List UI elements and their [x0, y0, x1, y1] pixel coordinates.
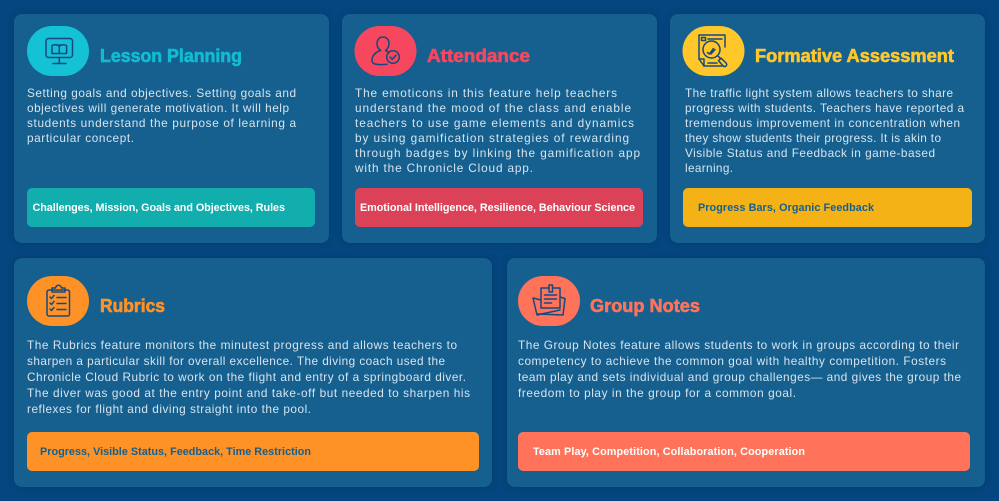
- tag: Group Notes game elements: [518, 432, 970, 471]
- text block: Attendance description: with the Chronicle Cloud app.: [354, 161, 533, 175]
- tag: Attendance game elements: Emotional Intelligence, Resilience, Behaviour Science: [360, 202, 635, 214]
- text block: Formative Assessment description: tremendous improvement in concentration when: [685, 116, 960, 130]
- text block: Formative Assessment description: learning.: [685, 161, 733, 175]
- text block: Group Notes description: team play and sets individual and group challenges— and gives the group the: [518, 370, 961, 384]
- text block: Attendance description: understand the mood of the class and enable: [355, 101, 631, 115]
- text block: Attendance description: through badges by linking the gamification app: [355, 146, 640, 160]
- tag: Formative Assessment game elements: [683, 188, 972, 227]
- text block: Attendance description: by using gamification strategies of rewarding: [355, 131, 629, 145]
- tag: Attendance game elements: [355, 188, 643, 227]
- text block: Group Notes description: [518, 338, 961, 400]
- text block: Lesson Planning description: objectives will generate motivation. It will help: [27, 101, 289, 115]
- text block: Lesson Planning description: particular concept.: [27, 131, 134, 145]
- heading: Formative Assessment: Formative Assessment: [755, 46, 954, 66]
- tag: Rubrics game elements: Progress, Visible Status, Feedback, Time Restriction: [40, 446, 311, 458]
- text block: Group Notes description: freedom to play in the group for a common goal.: [518, 386, 796, 400]
- text block: Formative Assessment description: Visible Status and Feedback in game-based: [685, 146, 935, 160]
- icon: person with check badge: [354, 26, 416, 76]
- text block: Attendance description: teachers to use game elements and dynamics: [355, 116, 634, 130]
- text block: Rubrics description: The Rubrics feature monitors the minutest progress and allows teachers to: [27, 338, 457, 352]
- text block: Rubrics description: Chronicle Cloud Rubric to work on the flight and entry of a springboard diver.: [27, 370, 466, 384]
- heading: Rubrics: Rubrics: [100, 296, 165, 316]
- tag: Lesson Planning game elements: [27, 188, 315, 227]
- text block: Formative Assessment description: they show students their progress. It is akin to: [685, 131, 941, 145]
- tag: Rubrics game elements: [27, 432, 479, 471]
- heading: Attendance: Attendance: [427, 46, 530, 66]
- text block: Formative Assessment description: progress with students. Teachers have reported a: [685, 101, 964, 115]
- text block: Lesson Planning description: students understand the purpose of learning a: [27, 116, 296, 130]
- tag: Formative Assessment game elements: Progress Bars, Organic Feedback: [698, 202, 875, 214]
- icon: monitor with book: [27, 26, 89, 76]
- text block: Attendance description: The emoticons in this feature help teachers: [355, 86, 617, 100]
- text block: Attendance description: [354, 86, 640, 175]
- text block: Rubrics description: sharpen a particular skill for overall excellence. The diving coach used the: [27, 354, 445, 368]
- text block: Lesson Planning description: Setting goals and objectives. Setting goals and: [27, 86, 296, 100]
- panel: Formative Assessment: [670, 14, 985, 243]
- panel: Group Notes: [507, 258, 985, 487]
- text block: Rubrics description: [27, 338, 470, 416]
- heading: Group Notes: Group Notes: [590, 296, 700, 316]
- text block: Formative Assessment description: The traffic light system allows teachers to share: [685, 86, 953, 100]
- icon: document with magnifier: [682, 26, 744, 76]
- text block: Group Notes description: competency to achieve the common goal with healthy competition. Fosters: [518, 354, 946, 368]
- panel: Lesson Planning: [14, 14, 329, 243]
- text block: Group Notes description: The Group Notes feature allows students to work in groups according to their: [518, 338, 959, 352]
- icon: stacked notes: [518, 276, 580, 326]
- text block: Formative Assessment description: [685, 86, 964, 175]
- text block: Rubrics description: The diver was good at the entry point and take-off but needed to sharpen his: [27, 386, 470, 400]
- tag: Group Notes game elements: Team Play, Competition, Collaboration, Cooperation: [533, 446, 805, 458]
- tag: Lesson Planning game elements: Challenges, Mission, Goals and Objectives, Rules: [32, 202, 285, 214]
- panel: Attendance: [342, 14, 657, 243]
- text block: Lesson Planning description: [27, 86, 296, 145]
- panel: Rubrics: [14, 258, 492, 487]
- icon: clipboard checklist: [27, 276, 89, 326]
- text block: Rubrics description: reflexes for flight and diving straight into the pool.: [27, 402, 311, 416]
- heading: Lesson Planning: Lesson Planning: [100, 46, 242, 66]
